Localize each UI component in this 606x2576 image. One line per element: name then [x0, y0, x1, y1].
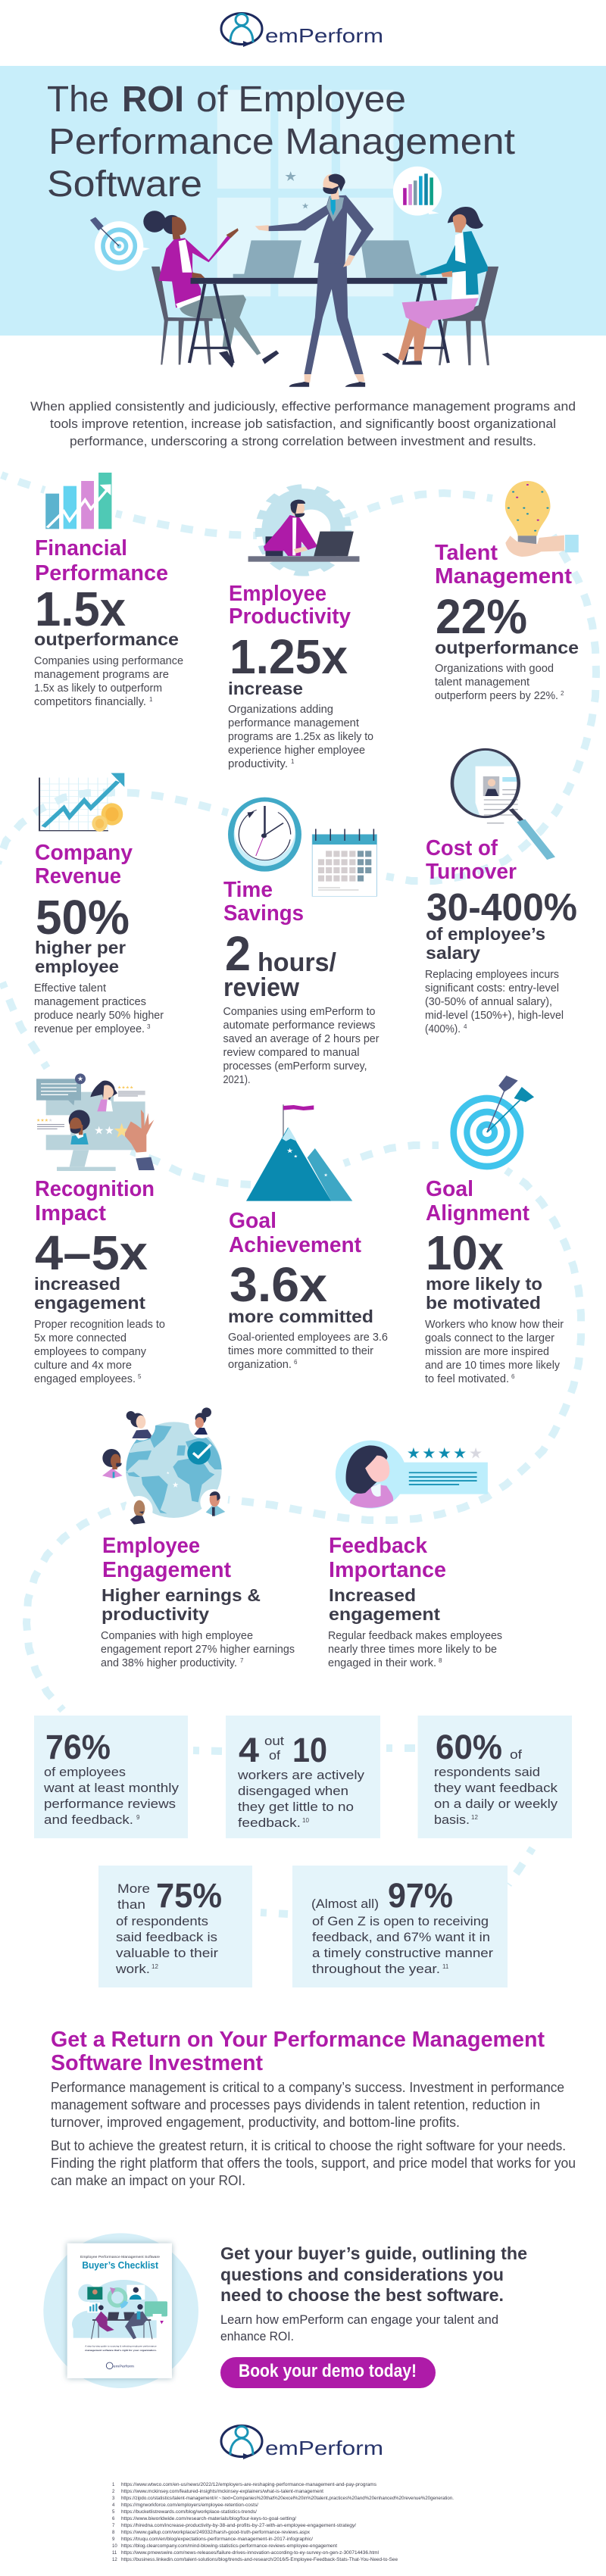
heading: Cost of: [426, 836, 498, 860]
heading: Importance: [329, 1558, 446, 1582]
references: https://zipdo.co/statistics/talent-management/#:~:text=Companies%20that%20excel%20in%20talent,practices%20and%20enhanced%20revenue%20generation.: [121, 2496, 454, 2501]
references: 8: [112, 2531, 115, 2535]
body text: processes (emPerform survey,: [223, 1060, 367, 1073]
icon: rising bar chart: [45, 473, 111, 529]
body text: Proper recognition leads to: [34, 1319, 165, 1331]
body text: 4: [464, 1023, 467, 1030]
heading: Management: [435, 564, 572, 589]
stat: [34, 582, 179, 649]
heading: Engagement: [102, 1558, 231, 1582]
stat: Higher earnings &: [102, 1585, 261, 1605]
body text: [34, 655, 183, 708]
body text: nearly three times more likely to be: [328, 1644, 497, 1656]
stat card: 97%: 97%: [388, 1876, 453, 1915]
references: https://hiredna.com/increase-productivity-by-38-and-profits-by-27-with-an-employee-engagement-strategy/: [121, 2524, 356, 2528]
stat: be motivated: [426, 1293, 541, 1313]
heading: [35, 1177, 155, 1226]
button: Book your demo today!: [239, 2361, 417, 2381]
body text: experience higher employee: [228, 745, 365, 757]
stat: 22%: [436, 589, 527, 644]
references: 10: [112, 2544, 117, 2549]
logo: emPerform header: [221, 14, 383, 47]
stat card: 4 out of 10: disengaged when: [238, 1784, 348, 1798]
body text: organization.: [228, 1359, 292, 1371]
body text: can make an impact on your ROI.: [51, 2173, 245, 2188]
stat card: 76%: 76%: [45, 1728, 111, 1766]
body text: 1: [291, 758, 295, 765]
stat: higher per: [35, 938, 126, 957]
heading: Time: [223, 878, 273, 902]
heading: Employee: [102, 1534, 200, 1558]
heading: Goal: [426, 1177, 473, 1201]
heading: Goal: [229, 1209, 276, 1233]
stat card: 76%: 9: [136, 1814, 140, 1821]
icon: mountain with flag: [246, 1104, 352, 1201]
buyer's checklist book cover: Employee Performance Management Software: [80, 2255, 160, 2259]
stat card: 60%: 12: [471, 1814, 478, 1821]
stat: review: [223, 973, 300, 1002]
stat card: 4 out of 10: 10: [302, 1817, 309, 1824]
body text: 7: [240, 1657, 244, 1664]
body text: Organizations adding: [228, 704, 333, 716]
heading: Financial: [35, 536, 127, 560]
intro paragraph: tools improve retention, increase job satisfaction, and significantly boost organizational: [50, 417, 556, 431]
body text: 5x more connected: [34, 1332, 127, 1344]
chair: right: [439, 267, 498, 365]
references: 3: [112, 2496, 115, 2501]
stat: engagement: [34, 1293, 145, 1313]
icon: monitor with rating stars and hand: [36, 1073, 155, 1171]
heading: need to choose the best software.: [220, 2285, 504, 2305]
body text: Goal-oriented employees are 3.6: [228, 1332, 388, 1344]
person: left woman: [143, 211, 279, 367]
stat: 2: [225, 926, 251, 981]
body text: [34, 982, 164, 1035]
heading: Revenue: [35, 864, 121, 888]
stat: [426, 1226, 542, 1313]
buyer's checklist book cover: Buyer’s Checklist: [82, 2260, 159, 2271]
hero illustration: meeting at a table: [90, 167, 498, 387]
title: Performance Management: [48, 122, 515, 162]
stat: increase: [228, 679, 303, 698]
body text: Effective talent: [34, 982, 106, 994]
references: https://bucketlistrewards.com/blog/workplace-statistics-trends/: [121, 2510, 257, 2515]
body text: [425, 1319, 564, 1385]
stat: [426, 885, 577, 963]
heading: [220, 2243, 527, 2305]
body text: saved an average of 2 hours per: [223, 1033, 380, 1045]
panel: Employee Engagement: [98, 1407, 295, 1669]
stat card: 75%: work.: [115, 1962, 150, 1976]
stat card: 97%: a timely constructive manner: [312, 1946, 493, 1960]
body text: [34, 1319, 165, 1385]
icon: globe with people: [98, 1407, 226, 1525]
stat: 1.5x: [35, 582, 126, 636]
stat: 3.6x: [230, 1257, 327, 1312]
body text: [228, 1332, 388, 1371]
stat: [223, 926, 337, 1002]
panel: Time Savings: [223, 798, 380, 1086]
body text: 3: [147, 1023, 151, 1030]
heading: [102, 1534, 231, 1582]
references: 6: [112, 2517, 115, 2521]
table: [189, 278, 448, 364]
body text: revenue per employee.: [34, 1023, 145, 1035]
heading: Get a Return on Your Performance Management: [51, 2028, 545, 2052]
buyer's checklist book cover: management software that’s right for your organization.: [85, 2349, 157, 2352]
body text: and 38% higher productivity.: [101, 1657, 237, 1669]
stat card: 60%: 60%: [436, 1728, 502, 1766]
dashed connector path: [0, 475, 596, 1914]
stat: 4–5x: [35, 1226, 148, 1280]
stat card: 60%: they want feedback: [434, 1781, 558, 1795]
body text: mid-level (150%+), high-level: [425, 1010, 564, 1022]
logo: emPerform footer: emPerform: [265, 2437, 383, 2459]
panel: Cost of Turnover: [425, 749, 577, 1035]
references: https://truqu.com/en/blog/expectations-performance-management-in-2017-infographic/: [121, 2537, 313, 2542]
heading: Turnover: [426, 860, 517, 884]
panel: Feedback Importance: [328, 1441, 502, 1669]
stat: hours/: [258, 948, 337, 977]
heading: [223, 878, 304, 926]
body text: management practices: [34, 996, 146, 1008]
icon: hand holding light bulb: [505, 481, 579, 557]
stat card: 4 out of 10: [226, 1716, 380, 1838]
body text: [51, 2080, 576, 2188]
buyer's checklist book cover: [43, 2233, 198, 2388]
stat card: 75%: said feedback is: [116, 1930, 217, 1944]
body text: Regular feedback makes employees: [328, 1630, 502, 1642]
stat card: 75%: of respondents: [116, 1914, 208, 1928]
body text: (30-50% of annual salary),: [425, 996, 552, 1008]
stat card: 4 out of 10: workers are actively: [237, 1768, 365, 1782]
stat card: 60%: [418, 1716, 572, 1838]
heading: Recognition: [35, 1177, 155, 1201]
stat: Increased: [329, 1585, 416, 1605]
references: https://business.linkedin.com/talent-solutions/blog/trends-and-research/2016/5-Employee-Feedback-Stats-That-You-Need-to-See: [121, 2558, 398, 2562]
body text: goals connect to the larger: [425, 1332, 554, 1344]
title: [47, 80, 515, 205]
stat card: 97%: of Gen Z is open to receiving: [312, 1914, 489, 1928]
stat card: 4 out of 10: feedback.: [238, 1816, 301, 1830]
body text: 6: [294, 1359, 298, 1366]
body text: 1.5x as likely to outperform: [34, 682, 162, 695]
title: ROI: [122, 80, 184, 120]
stat: [435, 589, 579, 657]
stat card: 97%: (Almost all): [311, 1897, 379, 1911]
body text: But to achieve the greatest return, it is critical to choose the right software for your needs.: [51, 2138, 566, 2153]
icon: growth line chart with coins: [39, 773, 124, 832]
section: Get a Return: [51, 2028, 576, 2188]
body text: engaged in their work.: [328, 1657, 436, 1669]
stat card: 76%: [34, 1716, 188, 1838]
button: [220, 2357, 436, 2388]
body text: [223, 1006, 380, 1086]
stat card: 4 out of 10: 10: [292, 1731, 327, 1769]
person: standing man: [255, 174, 373, 387]
logo: emPerform footer: [221, 2425, 383, 2459]
body text: engagement report 27% higher earnings: [101, 1644, 295, 1656]
heading: [329, 1534, 446, 1582]
stat card: 4 out of 10: out: [264, 1734, 284, 1748]
body text: Workers who know how their: [425, 1319, 564, 1331]
references: 9: [112, 2537, 115, 2542]
stat: more likely to: [426, 1274, 542, 1294]
heading: Performance: [35, 561, 168, 585]
stat card: 75%: [98, 1866, 252, 1987]
body text: 6: [511, 1373, 515, 1380]
body text: (400%).: [425, 1023, 461, 1035]
body text: Companies using performance: [34, 655, 183, 667]
icon: clock and calendar: [228, 798, 376, 896]
body text: employees to company: [34, 1346, 147, 1358]
heading: Employee: [229, 582, 326, 606]
heading: [35, 536, 168, 585]
body text: Performance management is critical to a company’s success. Investment in performance: [51, 2080, 564, 2095]
laptops: [233, 240, 426, 278]
references: https://mgrworkforce.com/employers/employee-retention-costs/: [121, 2503, 258, 2508]
heading: [35, 841, 133, 888]
stat: productivity: [102, 1604, 209, 1624]
panel: Goal Achievement: [228, 1104, 388, 1371]
body text: productivity.: [228, 758, 288, 770]
references: 5: [112, 2510, 115, 2515]
stat: 10x: [426, 1226, 504, 1280]
heading: [229, 1209, 361, 1257]
references: https://www.wtwco.com/en-us/news/2022/12/employers-are-reshaping-performance-management-and-pay-programs: [121, 2483, 376, 2487]
heading: Software Investment: [51, 2051, 263, 2075]
stat: 30-400%: [426, 885, 577, 929]
body text: talent management: [435, 676, 529, 688]
body text: Companies with high employee: [101, 1630, 253, 1642]
stat: [102, 1585, 261, 1624]
body text: Companies using emPerform to: [223, 1006, 376, 1018]
body text: Finding the right platform that offers the tools, support, and price model that works for you: [51, 2156, 576, 2171]
body text: culture and 4x more: [34, 1360, 132, 1372]
title: The: [47, 80, 109, 120]
chair: left: [152, 267, 213, 364]
body text: [101, 1630, 295, 1669]
stat: [329, 1585, 440, 1624]
icon: profile with star rating: [336, 1441, 488, 1509]
stat: salary: [426, 943, 480, 963]
stat: of employee’s: [426, 924, 545, 944]
body text: turnover, improved engagement, productivity, and bottom-line profits.: [51, 2115, 460, 2130]
heading: Talent: [435, 541, 498, 565]
body text: to feel motivated.: [425, 1373, 509, 1385]
icon: person at laptop in front of gear: [248, 489, 359, 572]
call to action: [220, 2243, 527, 2388]
intro paragraph: [30, 399, 576, 448]
stat card: 75%: 75%: [156, 1876, 222, 1915]
body text: mission are more inspired: [425, 1346, 549, 1358]
stat: [34, 1226, 148, 1313]
heading: Feedback: [329, 1534, 428, 1558]
body text: engaged employees.: [34, 1373, 136, 1385]
body text: Learn how emPerform can engage your talent and: [220, 2312, 498, 2327]
stat card: 97%: throughout the year.: [312, 1962, 440, 1976]
body text: enhance ROI.: [220, 2329, 294, 2343]
body text: [425, 969, 564, 1035]
stat card: 75%: valuable to their: [116, 1946, 218, 1960]
stat: employee: [35, 957, 119, 976]
intro paragraph: performance, underscoring a strong correlation between investment and results.: [70, 434, 536, 448]
stat card: 60%: basis.: [434, 1813, 470, 1827]
stat: outperformance: [435, 638, 579, 657]
references: https://www.prnewswire.com/news-releases/failure-drives-innovation-according-to-ey-survey-on-gen-z-300714436.html: [121, 2551, 379, 2556]
heading: Productivity: [229, 604, 351, 629]
stat card: 60%: of: [510, 1747, 522, 1762]
references: 11: [112, 2551, 117, 2556]
references: 1: [112, 2483, 115, 2487]
body text: 8: [439, 1657, 442, 1664]
references: 4: [112, 2503, 115, 2508]
icon: bar chart speech bubble: [393, 167, 442, 216]
body text: 2: [561, 690, 564, 697]
references: https://www.biworldwide.com/research-materials/blog/four-keys-to-goal-setting/: [121, 2517, 296, 2521]
body text: 1: [149, 696, 153, 703]
stat card: 4 out of 10: they get little to no: [238, 1800, 354, 1814]
body text: competitors financially.: [34, 696, 146, 708]
panel: Talent Management: [435, 481, 579, 702]
stat card: 97%: [292, 1866, 508, 1987]
panel: Company Revenue: [34, 773, 164, 1035]
person: right woman: [382, 207, 488, 364]
title: of Employee: [196, 80, 406, 120]
stat: [35, 890, 130, 976]
buyer's checklist book cover: A step-by-step guide to sourcing & selecting employee performance: [85, 2345, 157, 2348]
body text: [435, 663, 564, 702]
body text: Replacing employees incurs: [425, 969, 559, 981]
references: [112, 2483, 454, 2562]
stat card: 75%: than: [117, 1897, 145, 1912]
stat card: 97%: feedback, and 67% want it in: [312, 1930, 490, 1944]
body text: [228, 704, 373, 770]
body text: significant costs: entry-level: [425, 982, 559, 994]
heading: Savings: [223, 901, 304, 926]
body text: [328, 1630, 502, 1669]
body text: times more committed to their: [228, 1345, 373, 1357]
panel: Goal Alignment: [425, 1076, 564, 1385]
stat card: 76%: want at least monthly: [43, 1781, 180, 1795]
stat card: 76%: of employees: [44, 1765, 126, 1779]
stat: 50%: [36, 890, 130, 945]
body text: automate performance reviews: [223, 1019, 376, 1032]
stat card: 76%: and feedback.: [44, 1813, 133, 1827]
hero banner: [0, 66, 606, 336]
body text: management programs are: [34, 669, 169, 681]
body text: outperform peers by 22%.: [435, 690, 558, 702]
heading: questions and considerations you: [220, 2265, 504, 2284]
heading: Impact: [35, 1201, 106, 1226]
stat card: 4 out of 10: of: [269, 1748, 280, 1763]
stat card: 97%: 11: [442, 1963, 449, 1970]
stat card: 60%: on a daily or weekly: [434, 1797, 558, 1811]
heading: [435, 541, 572, 589]
body text: produce nearly 50% higher: [34, 1010, 164, 1022]
stat card: 76%: performance reviews: [44, 1797, 176, 1811]
logo: emPerform header: emPerform: [265, 24, 383, 47]
stat: increased: [34, 1274, 120, 1294]
stat: engagement: [329, 1604, 440, 1624]
heading: [229, 582, 351, 629]
stat: 1.25x: [230, 629, 348, 684]
body text: programs are 1.25x as likely to: [228, 731, 373, 743]
panel: Recognition Impact: [34, 1073, 165, 1385]
body text: [220, 2312, 498, 2343]
buyer's checklist book cover: emPerform: [114, 2364, 134, 2368]
references: https://www.mckinsey.com/featured-insights/mckinsey-explainers/what-is-talent-management: [121, 2490, 323, 2494]
references: 2: [112, 2490, 115, 2494]
stat card: 75%: 12: [152, 1963, 158, 1970]
heading: Company: [35, 841, 133, 865]
intro paragraph: When applied consistently and judiciously, effective performance management programs and: [30, 399, 576, 414]
icon: bullseye target with arrows: [450, 1076, 534, 1169]
references: 12: [112, 2558, 117, 2562]
body text: review compared to manual: [223, 1047, 359, 1059]
icon: target speech bubble: [90, 217, 150, 271]
stat card: 4 out of 10: 4: [239, 1731, 259, 1769]
panel: Financial Performance: [34, 473, 183, 708]
references: https://blog.clearcompany.com/mind-blowing-statistics-performance-reviews-employee-engagement: [121, 2544, 337, 2549]
body text: performance management: [228, 717, 359, 729]
references: 7: [112, 2524, 115, 2528]
icon: magnifying glass over resume: [451, 749, 551, 858]
stat card: 60%: respondents said: [434, 1765, 540, 1779]
heading: Get your buyer’s guide, outlining the: [220, 2243, 527, 2263]
heading: Achievement: [229, 1233, 361, 1257]
body text: and are 10 times more likely: [425, 1360, 561, 1372]
body text: management software and processes pays dividends in talent retention, reduction in: [51, 2097, 540, 2112]
heading: [426, 836, 517, 884]
references: https://www.gallup.com/workplace/249332/harsh-good-truth-performance-reviews.aspx: [121, 2531, 310, 2535]
body text: Organizations with good: [435, 663, 554, 675]
stat: more committed: [228, 1307, 373, 1326]
stat card: 75%: More: [117, 1881, 150, 1896]
body text: 5: [138, 1373, 142, 1380]
stat: outperformance: [34, 629, 179, 649]
heading: [426, 1177, 529, 1226]
stat: [228, 1257, 373, 1326]
heading: Alignment: [426, 1201, 529, 1226]
heading: [51, 2028, 545, 2075]
title: Software: [47, 164, 202, 205]
panel: Employee Productivity: [228, 489, 373, 770]
body text: 2021).: [223, 1074, 250, 1086]
